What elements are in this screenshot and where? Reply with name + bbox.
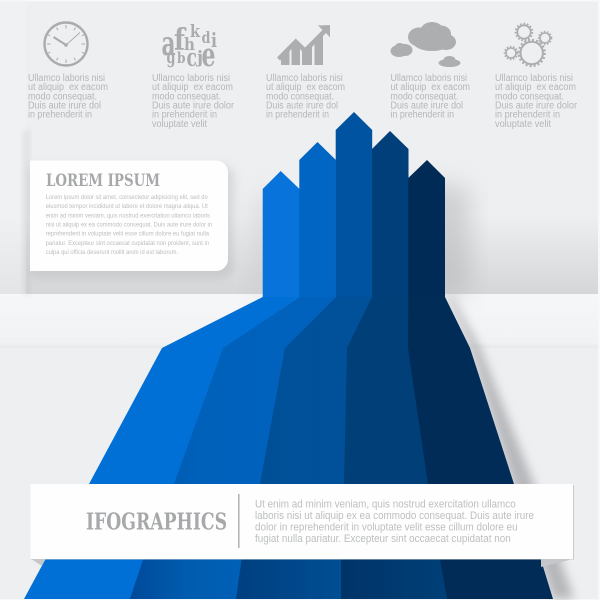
icon: letters [162, 22, 217, 74]
text block: column 2: ut aliquip ex eacom [152, 82, 233, 93]
icon: rising chart [277, 25, 330, 65]
text block: column 3: modo consequat. [266, 91, 334, 102]
icon: letters: g [166, 46, 176, 68]
panel: ifographics banner [30, 484, 574, 567]
text block: column 1: modo consequat. [28, 91, 97, 102]
text block: column 5: Duis aute irure dolor [495, 100, 578, 111]
text block: column 4: Ullamco laboris nisi [390, 73, 467, 84]
text block: column 1 [28, 73, 108, 120]
icon: clouds [390, 22, 460, 67]
heading: ifographics: IFOGRAPHICS [86, 508, 227, 536]
arrow 5 [408, 160, 445, 298]
text block: banner body [255, 498, 534, 545]
text block: lorem body: culpa qui officia deserunt mollit anim id est laborum. [46, 249, 178, 256]
text block: lorem body: pariatur. Excepteur sint occaecat cupidatat non proident, sunt in [46, 240, 209, 247]
arrow 4 [372, 131, 408, 298]
text block: column 5: voluptate velit [495, 119, 551, 130]
floor strip 5 [408, 297, 553, 599]
text block: column 2: modo consequat. [152, 91, 221, 102]
icon: letters: j [195, 48, 203, 68]
panel: blue arrow chart [24, 112, 553, 599]
text block: column 4: in prehenderit in [390, 110, 454, 120]
text block: column 2: in prehenderit in [152, 110, 217, 120]
text block: column 4 [390, 73, 470, 120]
text block: column 5: ut aliquip ex eacom [495, 82, 576, 93]
arrow 3 [336, 112, 372, 298]
text block: banner body: laboris nisi ut aliquip ex ea commodo consequat. Duis aute irure [255, 510, 534, 522]
text block: banner body: fugiat nulla pariatur. Excepteur sint occaecat cupidatat non [255, 533, 511, 545]
text block: column 2: Ullamco laboris nisi [152, 73, 230, 84]
floor strip 4 [341, 297, 448, 599]
floor strip 4 lower shade [341, 560, 447, 599]
icon: letters: i [211, 28, 217, 52]
floor strip 2 lower shade [130, 560, 242, 599]
text block: banner body: Ut enim ad minim veniam, quis nostrud exercitation ullamco [255, 498, 516, 510]
icon: letters: h [184, 35, 195, 55]
text block: column 2: Duis aute irure dolor [152, 100, 235, 111]
icon: letters: b [177, 49, 186, 67]
text block: column 4: Duis aute irure dol [390, 100, 463, 111]
text block: column 5: Ullamco laboris nisi [495, 73, 573, 84]
text block: column 3: in prehenderit in [266, 110, 329, 120]
arrow 1 [263, 171, 300, 298]
shadows behind arrows [250, 180, 574, 599]
text block: column 4: modo consequat. [390, 91, 458, 102]
text block: column 5: in prehenderit in [495, 110, 560, 120]
text block: lorem body: nisi ut aliquip ex ea commodo consequat. Duis aute irure dolor in [46, 222, 212, 229]
heading: lorem ipsum: LOREM IPSUM [46, 171, 160, 190]
text block: column 5: modo consequat. [495, 91, 564, 102]
icon: clock [44, 22, 88, 66]
floor strip 2 [130, 297, 336, 599]
icon: letters: d [202, 28, 210, 47]
text block: column 1: Ullamco laboris nisi [28, 73, 105, 84]
text block: lorem body: reprehenderit in voluptate velit esse cillum dolore eu fugiat nulla [46, 231, 209, 238]
icon: letters: f [174, 23, 187, 58]
text block: column 3: Duis aute irure dol [266, 100, 338, 111]
text block: column 4: ut aliquip ex eacom [390, 82, 470, 93]
arrow 2 [299, 142, 336, 298]
text block: banner body: dolor in reprehenderit in voluptate velit esse cillum dolore eu [255, 521, 518, 533]
text block: lorem body [46, 194, 212, 256]
text block: column 5 [495, 73, 578, 130]
text block: column 3: Ullamco laboris nisi [266, 73, 343, 84]
icon: letters: a [162, 24, 176, 64]
text block: column 2 [152, 73, 235, 130]
text block: lorem body: eiusmod tempor incididunt ut labore et dolore magna aliqua. Ut [46, 203, 208, 210]
text block: column 2: voluptate velit [152, 119, 207, 130]
floor strip 1 [24, 297, 300, 599]
text block: column 3 [266, 73, 345, 120]
text block: column 1: ut aliquip ex eacom [28, 82, 108, 93]
text block: column 1: in prehenderit in [28, 110, 92, 120]
text block: column 3: ut aliquip ex eacom [266, 82, 345, 93]
icon: gears [505, 24, 551, 66]
floor strip 3 [236, 297, 372, 599]
panel: lorem ipsum card [23, 130, 234, 295]
floor strip 3 lower shade [236, 560, 341, 599]
icon: letters: c [186, 43, 197, 72]
text block: lorem body: Lorem ipsum dolor sit amet, consectetur adipisicing elit, sed do [46, 194, 208, 201]
text block: column 1: Duis aute irure dol [28, 100, 101, 111]
text block: lorem body: enim ad minim veniam, quis nostrud exercitation ullamco laboris [46, 212, 210, 219]
icon: letters: e [202, 35, 216, 74]
icon: letters: k [190, 22, 201, 42]
